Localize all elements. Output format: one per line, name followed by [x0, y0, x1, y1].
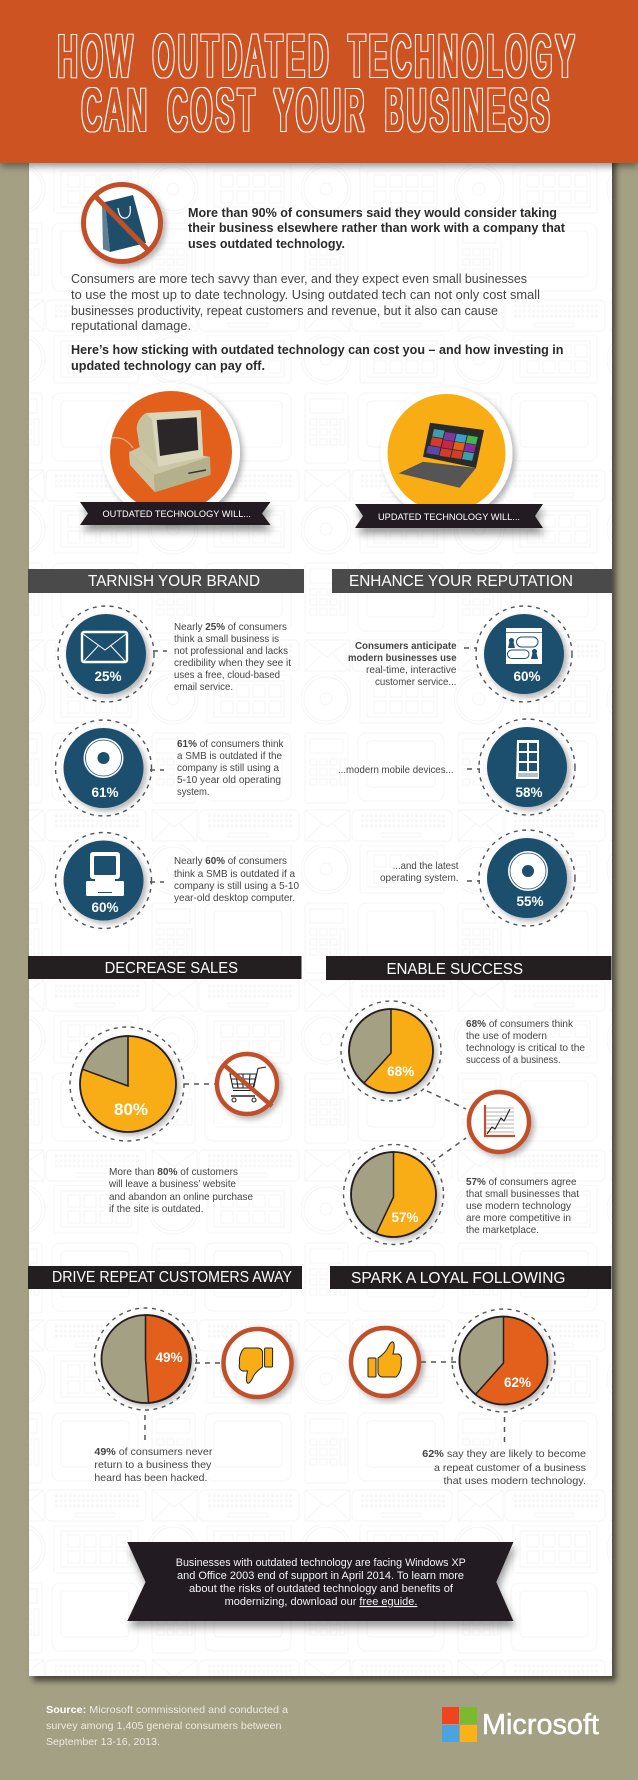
text: customer service: modern businesses use: [348, 652, 457, 664]
text: 62% customers: that uses modern technology.: [444, 1475, 586, 1487]
text: 61% operating system: 61% of consumers think: [177, 738, 284, 750]
Microsoft logo: Microsoft: [482, 1709, 599, 1741]
icon: envelope: [82, 632, 127, 662]
stat: 25% email: 25%: [94, 669, 122, 684]
intro bold statement: [71, 342, 564, 373]
text: 80% customers: [108, 1166, 253, 1215]
stat: 60% customer service: [348, 606, 572, 702]
heading: tarnish your brand: [28, 569, 304, 593]
stat: 58% mobile devices: 58%: [515, 785, 543, 800]
text: customer service: [348, 640, 457, 688]
white content panel: [29, 150, 612, 1676]
pie chart: 80%: 80%: [114, 1100, 148, 1119]
heading: enable success: [326, 956, 612, 980]
stat: 25% email: [58, 606, 291, 702]
heading: decrease sales: DECREASE SALES: [105, 960, 238, 977]
heading: tarnish your brand: TARNISH YOUR BRAND: [88, 573, 260, 590]
text: 68% consumers: 68% of consumers think: [466, 1018, 574, 1030]
icon: thumbs up: [351, 1328, 419, 1396]
header banner: [0, 0, 638, 163]
text: 62% customers: 62% say they are likely to become: [422, 1448, 586, 1460]
text: 57% consumers: the marketplace.: [466, 1224, 539, 1236]
source note: survey among 1,405 general consumers between: [46, 1720, 282, 1732]
text: mobile devices: ...modern mobile devices...: [338, 764, 454, 776]
pie chart: 80%: [70, 1027, 184, 1141]
stat: 60% desktop: 60%: [91, 900, 119, 915]
text: 57% consumers: that small businesses that: [466, 1188, 579, 1200]
text: 68% consumers: technology is critical to the: [466, 1042, 585, 1054]
text: 25% email: Nearly 25% of consumers: [174, 621, 287, 633]
Microsoft logo: [442, 1707, 599, 1742]
text: latest operating system: [380, 860, 459, 884]
text: latest operating system: ...and the latest: [393, 860, 459, 872]
text: 25% email: not professional and lacks: [174, 645, 288, 657]
callout ribbon: end of support: and Office 2003 end of support in April 2014. To learn more: [177, 1570, 464, 1582]
text: 61% operating system: system.: [177, 786, 210, 798]
stat: 60% customer service: 60%: [513, 669, 541, 684]
callout ribbon: end of support: Businesses with outdated technology are facing Windows XP: [176, 1557, 466, 1569]
icon: thumbs down: [224, 1329, 292, 1397]
text: 25% email: email service.: [174, 681, 233, 693]
pie chart: 62%: [452, 1309, 555, 1412]
pie chart: 57%: [344, 1144, 444, 1244]
text: 60% desktop: company is still using a 5-10: [174, 880, 299, 892]
connectors: 62% pie: [421, 1362, 504, 1442]
text: 60% desktop: Nearly 60% of consumers: [174, 855, 287, 867]
heading: drive repeat customers away: DRIVE REPEAT CUSTOMERS AWAY: [52, 1269, 292, 1286]
heading: decrease sales: [28, 956, 302, 979]
heading: spark a loyal following: [330, 1266, 612, 1289]
callout ribbon: end of support: [127, 1542, 513, 1621]
stat: 55% operating system: [380, 830, 575, 926]
text: 49% consumers: return to a business they: [94, 1459, 212, 1471]
text: customer service: Consumers anticipate: [355, 640, 457, 652]
connector: pie to cart: [184, 1083, 216, 1085]
intro paragraph: [71, 271, 540, 333]
intro paragraph: businesses productivity, repeat customers and revenue, but it also can cause: [71, 303, 498, 318]
text: 68% consumers: success of a business.: [466, 1054, 561, 1066]
text: 57% consumers: are more competitive in: [466, 1212, 571, 1224]
intro paragraph: Consumers are more tech savvy than ever, and they expect even small businesses: [71, 271, 527, 286]
text: 80% customers: will leave a business’ website: [108, 1178, 236, 1190]
ribbon: updated technology will: UPDATED TECHNOLOGY WILL...: [378, 512, 520, 522]
text: 61% operating system: a SMB is outdated if the: [177, 750, 282, 762]
ribbon: updated technology will: [355, 504, 543, 528]
intro paragraph: to use the most up to date technology. Using outdated tech can not only cost small: [71, 287, 540, 302]
stat: 60% desktop: [56, 832, 299, 928]
ribbon: outdated technology will: [80, 502, 270, 525]
heading: enhance your reputation: [332, 569, 612, 593]
intro bold statement: updated technology can pay off.: [71, 358, 265, 373]
icon: no shopping cart: [217, 1054, 277, 1114]
stat: 61% operating system: 61%: [91, 785, 119, 800]
text: 57% consumers: 57% of consumers agree: [466, 1176, 577, 1188]
text: 61% operating system: 5-10 year old operating: [177, 774, 281, 786]
intro paragraph: reputational damage.: [71, 318, 191, 333]
text: 25% email: uses a free, cloud-based: [174, 669, 280, 681]
stat: 58% mobile devices: [338, 719, 575, 815]
intro highlight text: uses outdated technology.: [188, 236, 345, 251]
text: 60% desktop: think a SMB is outdated if a: [174, 868, 295, 880]
source note: Source: Microsoft commissioned and conducted a: [46, 1704, 288, 1716]
icon: tablet in yellow circle: [380, 387, 512, 519]
stat: 55% operating system: 55%: [516, 894, 544, 909]
callout ribbon: end of support: about the risks of outdated technology and benefits of: [189, 1583, 454, 1595]
text: customer service: real-time, interactive: [366, 664, 457, 676]
text: 25% email: think a small business is: [174, 633, 279, 645]
text: 57% consumers: use modern technology: [466, 1200, 572, 1212]
intro highlight text: [188, 205, 566, 251]
text: 61% operating system: company is still using a: [177, 762, 279, 774]
text: 57% consumers: [466, 1176, 579, 1236]
text: 80% customers: More than 80% of customers: [109, 1166, 238, 1178]
icon: mobile device: [516, 740, 539, 779]
text: 25% email: credibility when they see it: [174, 657, 291, 669]
icon: disc: [84, 738, 124, 778]
text: 49% consumers: [94, 1446, 213, 1484]
ribbon: outdated technology will: OUTDATED TECHNOLOGY WILL...: [102, 509, 251, 519]
text: 68% consumers: [466, 1018, 585, 1066]
text: 62% customers: a repeat customer of a business: [434, 1462, 586, 1474]
pie chart: 68%: 68%: [387, 1064, 414, 1079]
callout ribbon: end of support: modernizing, download our free eguide.: [225, 1596, 417, 1608]
text: 60% desktop: [174, 855, 299, 904]
intro bold statement: Here’s how sticking with outdated technology can cost you – and how investing in: [71, 342, 564, 357]
stat: 61% operating system: [56, 720, 284, 816]
icon: chat panel: [506, 628, 542, 664]
pie chart: 57%: 57%: [391, 1210, 419, 1225]
intro highlight text: More than 90% of consumers said they would consider taking: [188, 205, 557, 220]
text: 61% operating system: [177, 738, 284, 798]
source note: September 13-16, 2013.: [46, 1736, 160, 1748]
text: 80% customers: if the site is outdated.: [109, 1203, 204, 1215]
text: latest operating system: operating system.: [380, 872, 458, 884]
text: 49% consumers: 49% of consumers never: [94, 1446, 213, 1458]
icon: outdated computer in orange circle: [102, 383, 240, 521]
pie chart: 68%: [341, 1001, 441, 1101]
heading: drive repeat customers away: [28, 1266, 302, 1289]
text: 60% desktop: year-old desktop computer.: [174, 892, 295, 904]
source note: [46, 1704, 288, 1748]
icon: no shopping bag: [84, 184, 160, 262]
text: 68% consumers: the use of modern: [466, 1030, 547, 1042]
pie chart: 49%: [94, 1308, 196, 1410]
pie chart: 49%: 49%: [155, 1350, 183, 1365]
text: 25% email: [174, 621, 291, 693]
icon: desktop computer: [86, 852, 124, 896]
text: 80% customers: and abandon an online purchase: [109, 1191, 253, 1203]
heading: enable success: ENABLE SUCCESS: [386, 961, 523, 978]
pie chart: 62%: 62%: [504, 1375, 531, 1390]
heading: enhance your reputation: ENHANCE YOUR REPUTATION: [349, 573, 573, 590]
icon: disc: [508, 851, 548, 891]
text: customer service: customer service...: [375, 676, 456, 688]
icon: growth chart: [469, 1092, 529, 1152]
title: [58, 24, 578, 143]
text: 49% consumers: heard has been hacked.: [94, 1472, 207, 1484]
heading: spark a loyal following: SPARK A LOYAL FOLLOWING: [351, 1270, 566, 1287]
intro highlight text: their business elsewhere rather than work with a company that: [188, 220, 566, 235]
connectors: pies to chart icon: [427, 1091, 466, 1163]
connectors: 49% pie: [145, 1363, 220, 1440]
text: 62% customers: [422, 1448, 586, 1487]
